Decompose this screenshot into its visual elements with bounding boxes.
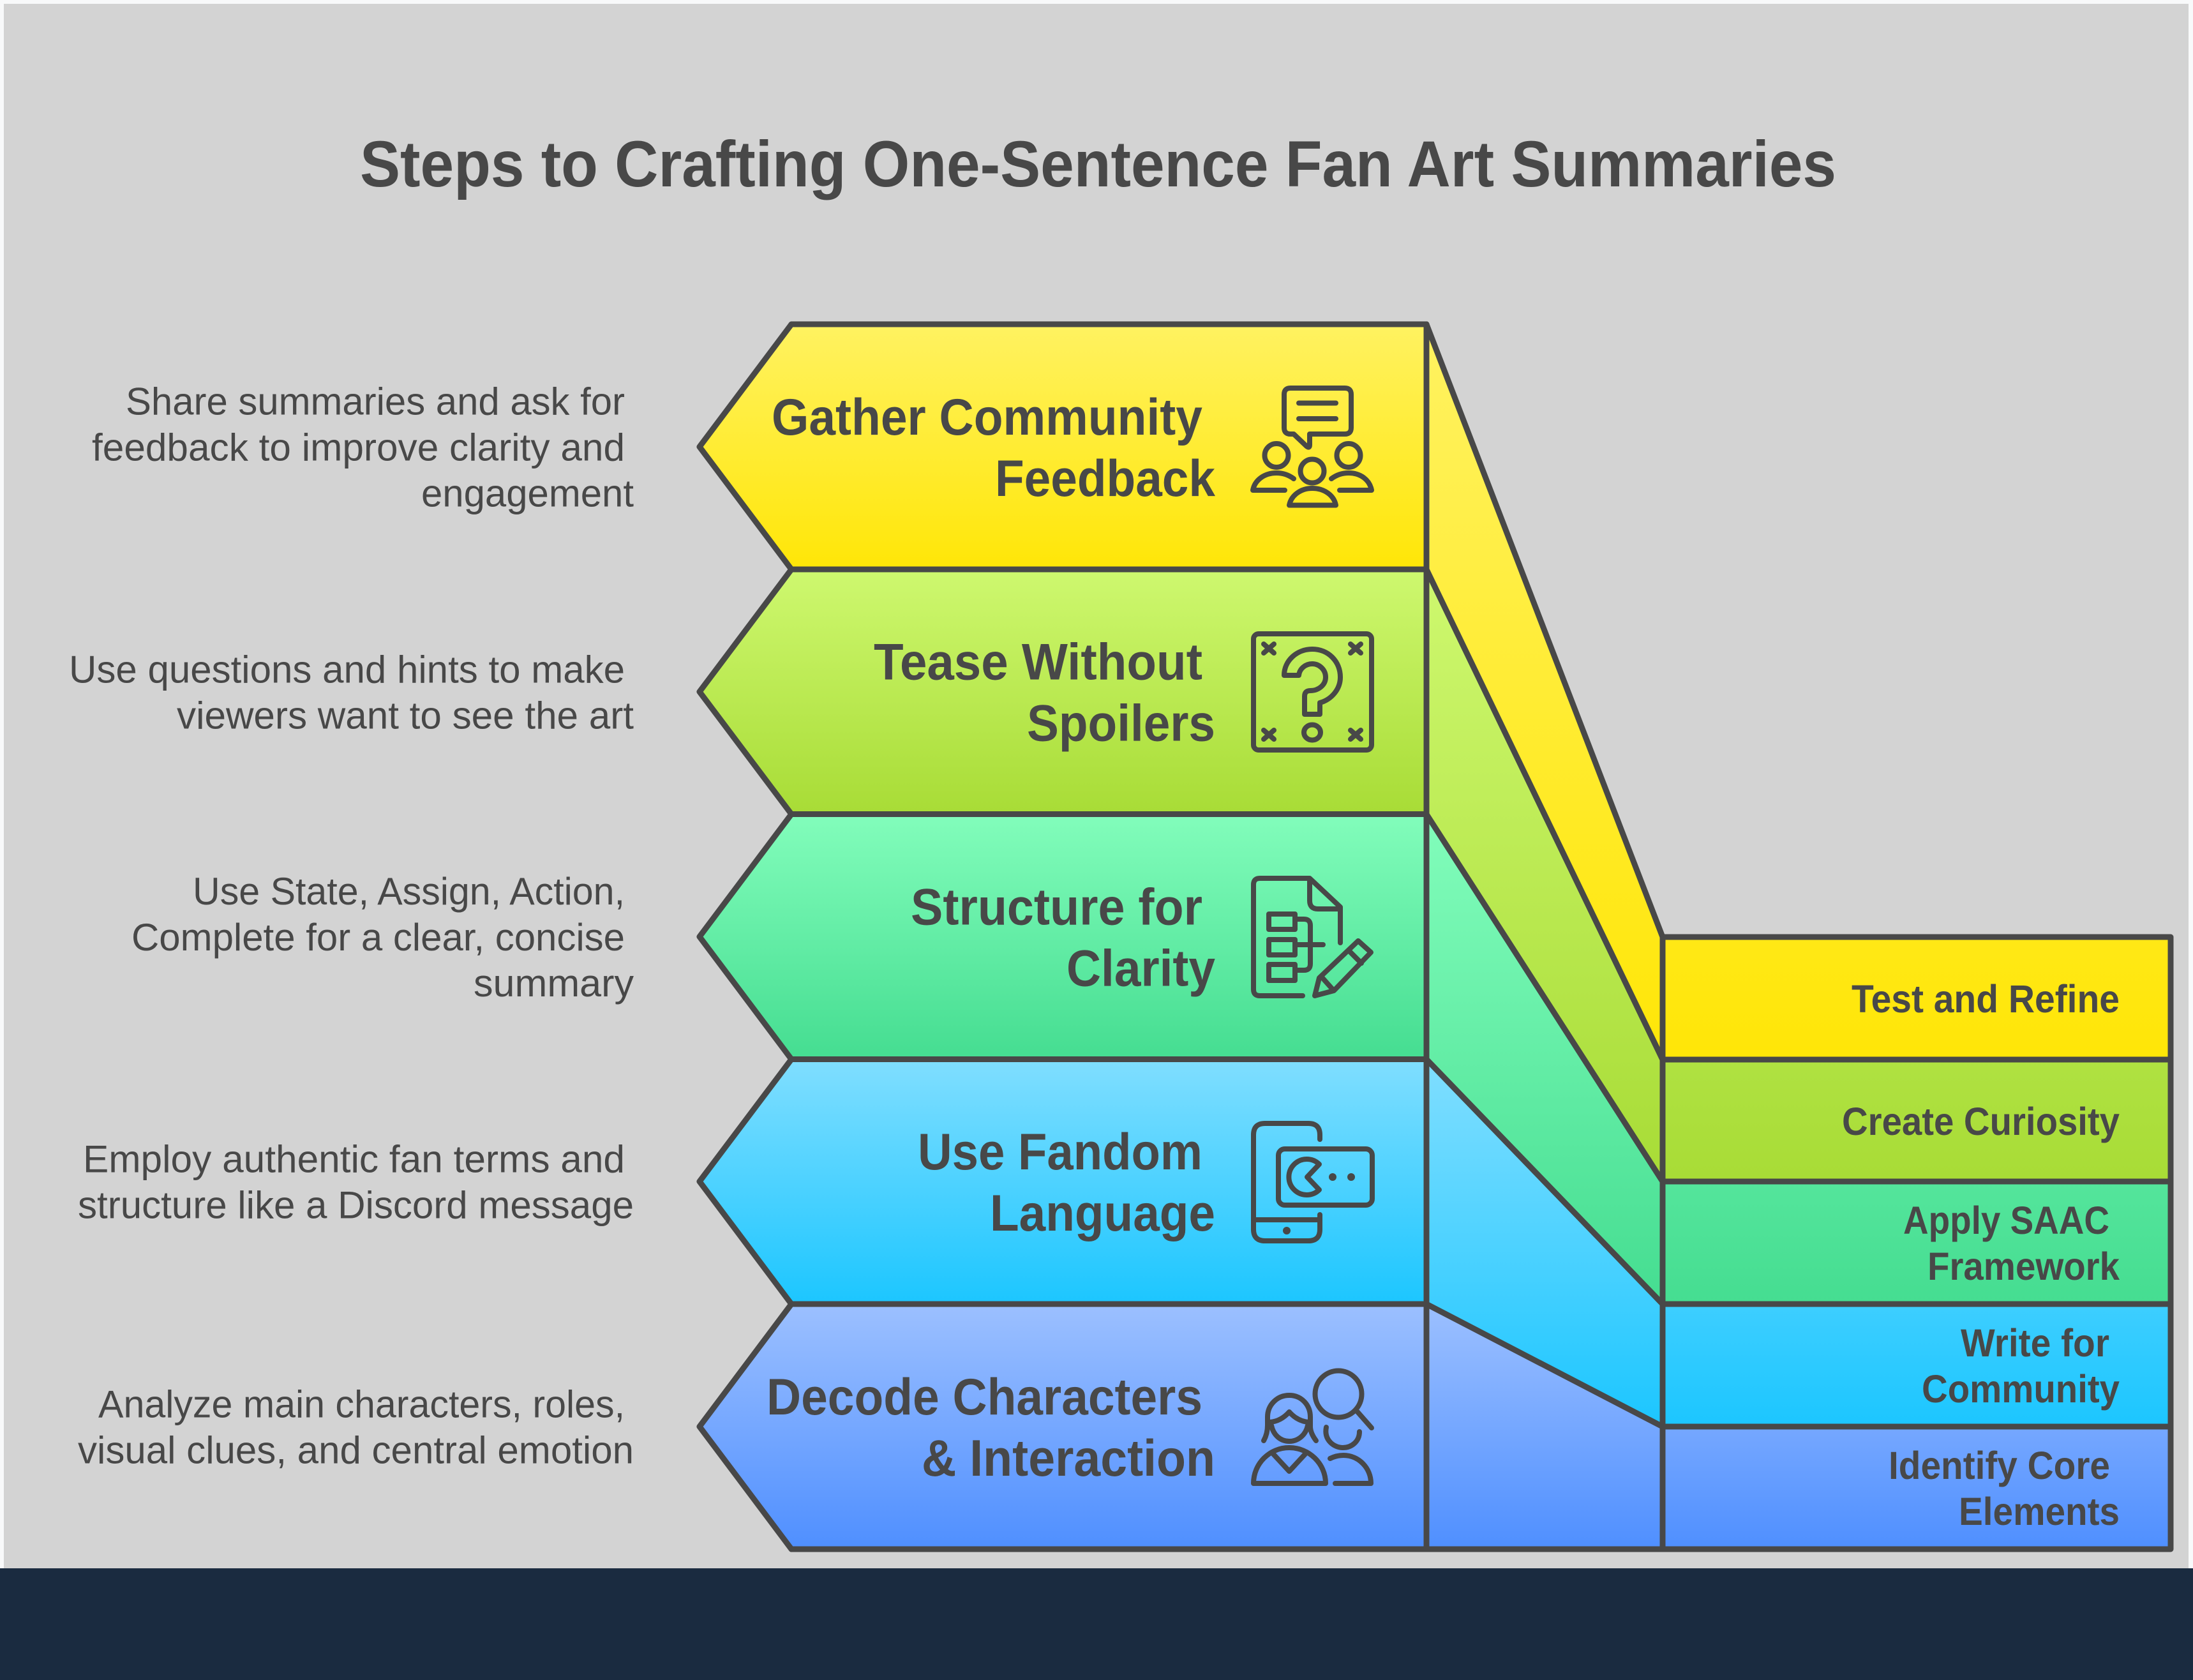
description: Tease Without Spoilers bbox=[69, 649, 634, 737]
description: Gather Community Feedback: engagement bbox=[421, 472, 634, 514]
box: Create Curiosity: Create Curiosity bbox=[1842, 1100, 2120, 1143]
connector band: lime bbox=[1426, 569, 1663, 1181]
step 2: Tease Without Spoilers bbox=[69, 569, 2171, 1181]
heading: Decode Characters and Interaction bbox=[767, 1369, 1215, 1487]
arrow panel: Use Fandom Language bbox=[700, 1060, 1426, 1304]
arrow panel: Gather Community Feedback bbox=[700, 324, 1426, 569]
heading: Decode Characters and Interaction: & Interaction bbox=[922, 1430, 1215, 1487]
box: Identify Core Elements: Elements bbox=[1959, 1490, 2120, 1533]
description: Decode Characters: Analyze main characters, roles, bbox=[98, 1383, 625, 1426]
heading: Tease Without Spoilers bbox=[874, 633, 1215, 752]
heading: Structure for Clarity bbox=[911, 878, 1215, 997]
description: Structure for Clarity: Complete for a clear, concise bbox=[131, 916, 625, 959]
step 5: Decode Characters and Interaction bbox=[78, 1304, 2171, 1549]
description: Structure for Clarity bbox=[131, 870, 634, 1005]
step 3: Structure for Clarity bbox=[131, 814, 2171, 1304]
description: Use Fandom Language bbox=[78, 1137, 634, 1227]
box: Identify Core Elements: Identify Core bbox=[1889, 1444, 2110, 1487]
description: Tease Without Spoilers: viewers want to see the art bbox=[177, 694, 634, 737]
description: Use Fandom Language: structure like a Discord message bbox=[78, 1183, 634, 1227]
description: Decode Characters bbox=[78, 1383, 634, 1472]
heading: Tease Without Spoilers: Spoilers bbox=[1027, 694, 1215, 752]
connector band: teal bbox=[1426, 814, 1663, 1304]
step 4: Use Fandom Language bbox=[78, 1060, 2171, 1427]
description: Gather Community Feedback: Share summaries and ask for bbox=[126, 380, 625, 423]
box: Test and Refine: Test and Refine bbox=[1852, 977, 2120, 1021]
icon: document with pencil bbox=[1254, 878, 1371, 996]
heading: Use Fandom Language bbox=[918, 1123, 1215, 1242]
box: Write for Community: Community bbox=[1922, 1367, 2120, 1411]
arrow panel: Structure for Clarity bbox=[700, 814, 1426, 1060]
step 1: Gather Community Feedback bbox=[92, 324, 2171, 1060]
box: Write for Community: Write for bbox=[1961, 1321, 2109, 1365]
description: Tease Without Spoilers: Use questions and hints to make bbox=[69, 649, 625, 691]
connector band: yellow bbox=[1426, 324, 1663, 1060]
box: Test and Refine bbox=[1663, 937, 2171, 1060]
box: Apply SAAC Framework bbox=[1663, 1181, 2171, 1304]
icon: phone with game screen bbox=[1254, 1123, 1372, 1241]
description: Decode Characters: visual clues, and central emotion bbox=[78, 1429, 634, 1472]
icon: community speech bubble bbox=[1253, 388, 1372, 506]
description: Use Fandom Language: Employ authentic fan terms and bbox=[83, 1137, 625, 1181]
box: Apply SAAC Framework: Framework bbox=[1927, 1245, 2120, 1288]
description: Structure for Clarity: Use State, Assign, Action, bbox=[193, 870, 625, 913]
heading: Tease Without Spoilers: Tease Without bbox=[874, 633, 1202, 691]
heading: Gather Community Feedback bbox=[772, 389, 1216, 507]
title: Steps to Crafting One-Sentence Fan Art Summaries bbox=[360, 128, 1836, 200]
heading: Gather Community Feedback: Feedback bbox=[995, 450, 1216, 507]
heading: Structure for Clarity: Clarity bbox=[1067, 940, 1215, 997]
connector band: cyan bbox=[1426, 1060, 1663, 1427]
description: Structure for Clarity: summary bbox=[474, 962, 634, 1005]
heading: Decode Characters and Interaction: Decode Characters bbox=[767, 1369, 1202, 1426]
arrow panel: Decode Characters bbox=[700, 1304, 1426, 1549]
heading: Structure for Clarity: Structure for bbox=[911, 878, 1202, 936]
arrow panel: Tease Without Spoilers bbox=[700, 569, 1426, 814]
heading: Use Fandom Language: Use Fandom bbox=[918, 1123, 1202, 1181]
icon: question mark box bbox=[1254, 634, 1372, 750]
box: Apply SAAC Framework: Apply SAAC bbox=[1903, 1199, 2109, 1242]
footer band bbox=[0, 1568, 2193, 1680]
icon: people and magnifier bbox=[1254, 1371, 1372, 1483]
description: Gather Community Feedback: feedback to improve clarity and bbox=[92, 426, 625, 469]
box: Create Curiosity bbox=[1663, 1060, 2171, 1181]
description: Gather Community Feedback bbox=[92, 380, 634, 514]
box: Write for Community bbox=[1663, 1304, 2171, 1427]
heading: Gather Community Feedback: Gather Community bbox=[772, 389, 1202, 446]
heading: Use Fandom Language: Language bbox=[990, 1185, 1215, 1242]
box: Identify Core Elements bbox=[1663, 1427, 2171, 1549]
connector band: blue bbox=[1426, 1304, 1663, 1549]
